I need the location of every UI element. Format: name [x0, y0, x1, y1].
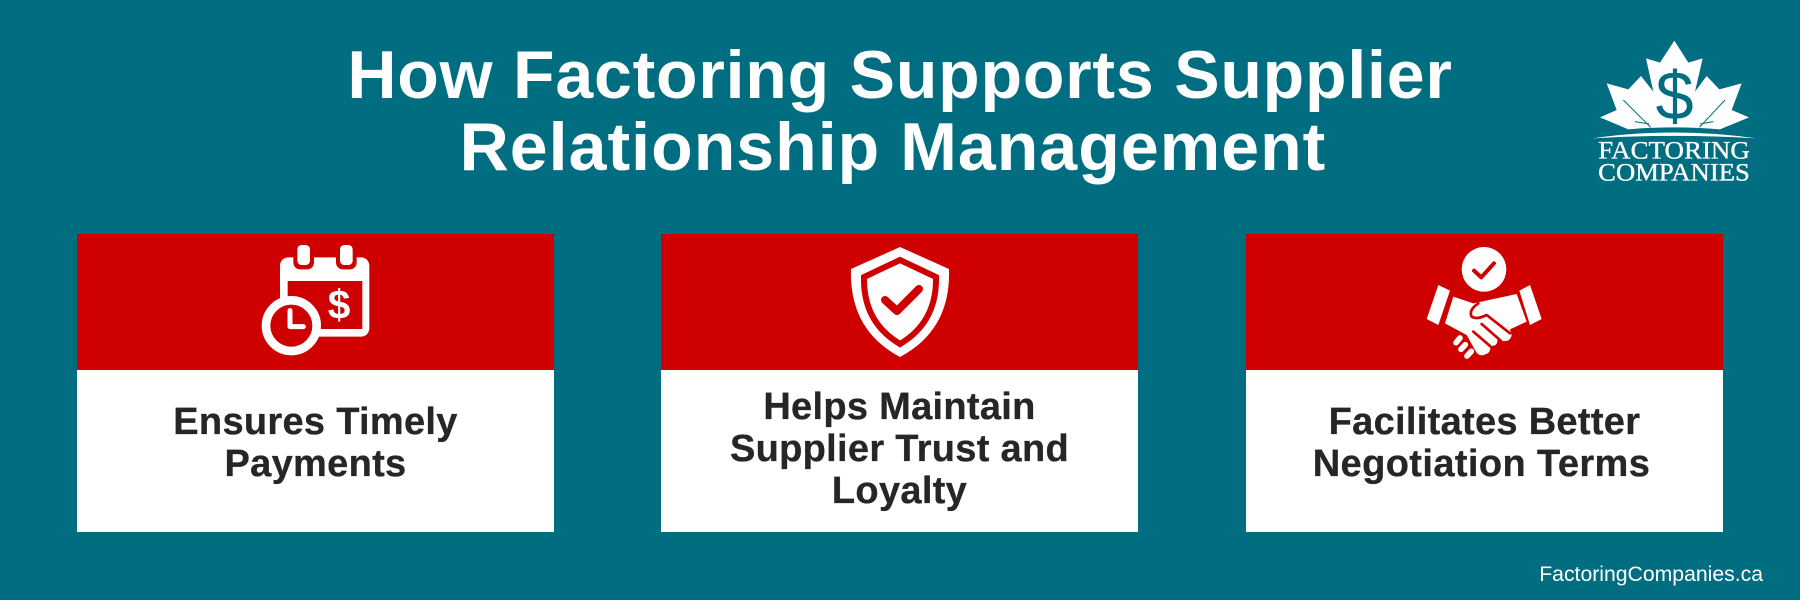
- label: Supplier Trust and: [730, 428, 1069, 470]
- icon: calendar with clock: $: [328, 282, 351, 328]
- panel: negotiation terms: [1246, 234, 1723, 532]
- icon: maple leaf: [1600, 41, 1749, 129]
- icon: dollar sign: $: [1656, 58, 1694, 134]
- icon: calendar with clock: [262, 245, 370, 356]
- label: [173, 401, 458, 485]
- logo text: FACTORING: [1598, 136, 1750, 164]
- title: Relationship Management: [460, 109, 1326, 185]
- icon: shield with check: [850, 247, 950, 357]
- panel: trust and loyalty: [661, 234, 1138, 532]
- logo arc: [1592, 132, 1756, 138]
- label: Loyalty: [832, 470, 967, 512]
- logo text: COMPANIES: [1598, 159, 1750, 187]
- red header: [661, 234, 1138, 370]
- label: [1313, 401, 1650, 485]
- icon: handshake with check: [1426, 247, 1542, 359]
- logo: [1592, 40, 1756, 187]
- label: Negotiation Terms: [1313, 443, 1650, 485]
- logo text: [1598, 136, 1750, 187]
- red header: [1246, 234, 1723, 370]
- red header: [77, 234, 554, 370]
- label: Ensures Timely: [173, 401, 458, 443]
- label: Helps Maintain: [763, 386, 1036, 428]
- footer url: FactoringCompanies.ca: [1539, 563, 1763, 586]
- title: [347, 37, 1453, 185]
- panel: timely payments: [77, 234, 554, 532]
- title: How Factoring Supports Supplier: [347, 37, 1453, 113]
- label: Payments: [225, 443, 406, 485]
- label: Facilitates Better: [1329, 401, 1640, 443]
- label: [730, 386, 1069, 512]
